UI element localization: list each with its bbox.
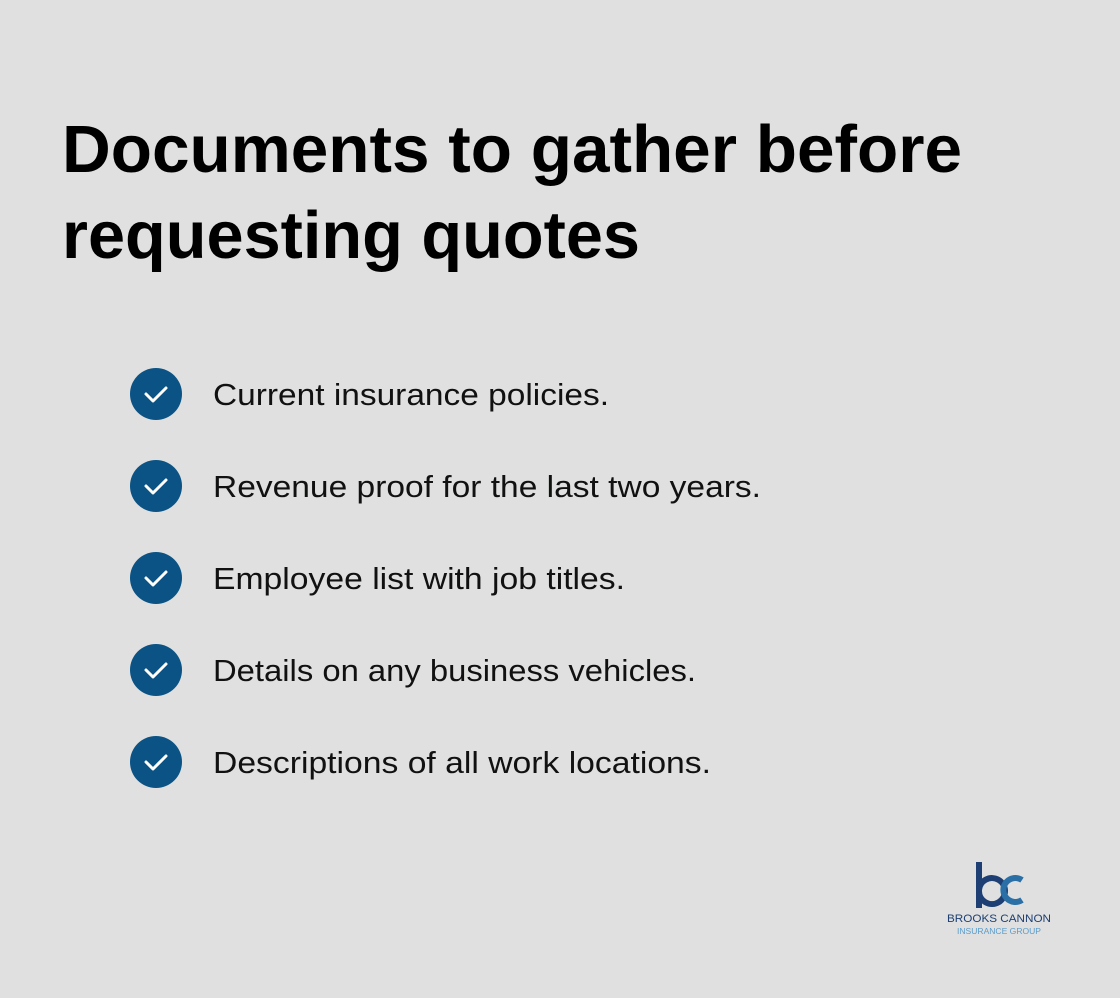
- item 5: Descriptions of all work locations.: [213, 745, 711, 780]
- title: requesting quotes: [62, 198, 640, 273]
- item 2: Revenue proof for the last two years.: [213, 469, 761, 504]
- logo: [947, 862, 1051, 936]
- checklist: [130, 368, 761, 788]
- title: [62, 112, 962, 273]
- item 1: [130, 368, 609, 420]
- item 5: [130, 736, 711, 788]
- item 4: Details on any business vehicles.: [213, 653, 696, 688]
- item 1: Current insurance policies.: [213, 377, 609, 412]
- item 3: [130, 552, 625, 604]
- title: Documents to gather before: [62, 112, 962, 187]
- item 2: [130, 460, 761, 512]
- logo: INSURANCE GROUP: [957, 927, 1041, 936]
- logo: BROOKS CANNON: [947, 913, 1051, 925]
- item 3: Employee list with job titles.: [213, 561, 625, 596]
- item 4: [130, 644, 696, 696]
